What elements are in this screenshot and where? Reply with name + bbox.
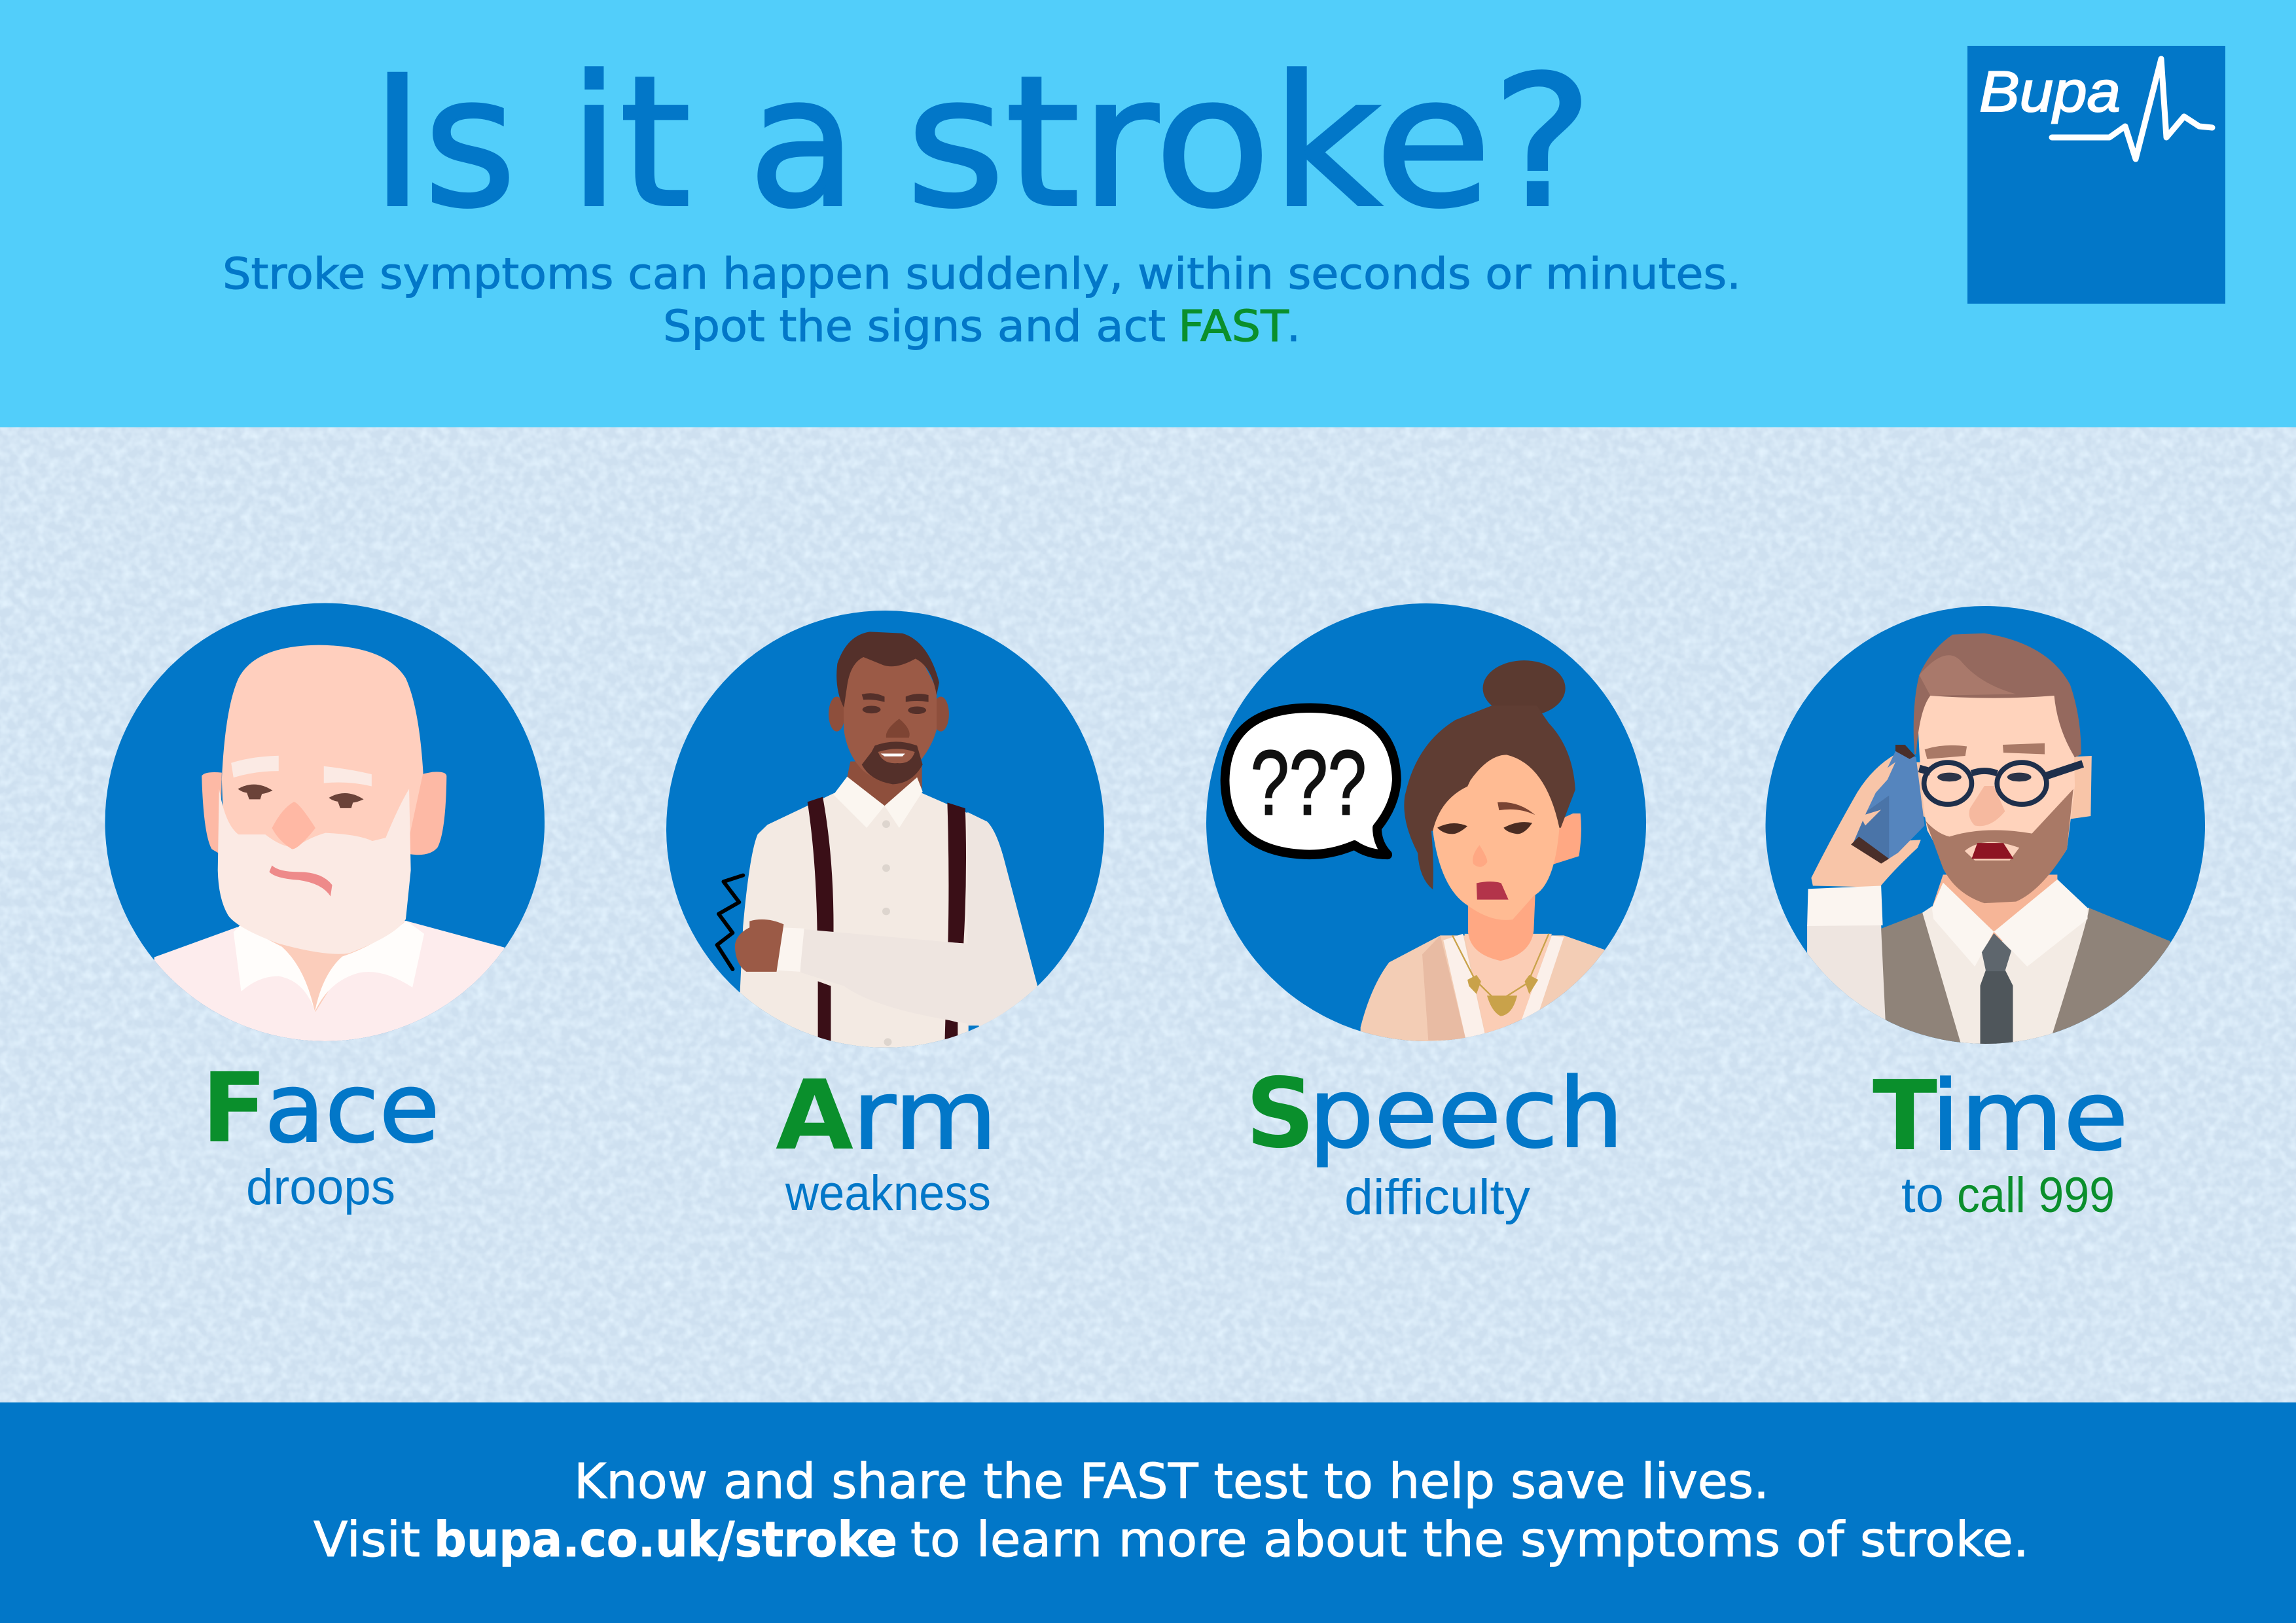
panel: textured light blue background bbox=[0, 427, 2296, 1402]
icon: man calling on phone bbox=[1766, 606, 2205, 1065]
text: difficulty: difficulty bbox=[1344, 1169, 1530, 1225]
heading: Time: ime bbox=[1931, 1060, 2128, 1172]
footer text: bupa.co.uk/stroke bbox=[434, 1512, 897, 1568]
title: a bbox=[748, 38, 857, 248]
panel: footer band bbox=[0, 1402, 2296, 1623]
footer text: to learn more about the symptoms of stroke. bbox=[910, 1512, 2029, 1568]
footer text bbox=[314, 1454, 2029, 1568]
heading: Speech: S bbox=[1246, 1058, 1315, 1169]
icon: man with drooping face bbox=[105, 603, 545, 1049]
text: weakness: weakness bbox=[785, 1166, 991, 1221]
heading: Arm bbox=[776, 1060, 997, 1171]
text: droops: droops bbox=[246, 1160, 395, 1215]
heading: Face: ace bbox=[264, 1052, 440, 1164]
logo: Bupa bbox=[1967, 46, 2225, 304]
text: to call 999 bbox=[1901, 1168, 2115, 1223]
logo: Bupa: Bupa bbox=[1979, 59, 2121, 124]
title: Is bbox=[371, 38, 516, 248]
panel: time bbox=[1766, 606, 2205, 1223]
panel: speech bbox=[1206, 603, 1646, 1225]
heading: Face: F bbox=[202, 1052, 267, 1164]
panel: face bbox=[105, 603, 545, 1215]
footer text: Visit bbox=[314, 1512, 420, 1568]
subtitle: FAST bbox=[1178, 301, 1289, 351]
panel: header band bbox=[0, 0, 2296, 427]
title: it bbox=[569, 38, 691, 248]
heading: Arm: A bbox=[776, 1060, 853, 1171]
subtitle: Spot the signs and act bbox=[663, 301, 1166, 351]
title: stroke? bbox=[906, 38, 1593, 248]
title bbox=[371, 38, 1593, 248]
subtitle: Stroke symptoms can happen suddenly, within seconds or minutes. bbox=[223, 249, 1741, 299]
icon: man with weak arm bbox=[666, 611, 1104, 1065]
heading: Arm: rm bbox=[852, 1060, 997, 1171]
heading: Speech: peech bbox=[1308, 1058, 1624, 1169]
footer text: Know and share the FAST test to help save lives. bbox=[574, 1454, 1769, 1510]
callout: speech bubble bbox=[1225, 708, 1397, 855]
panel: arm bbox=[666, 611, 1104, 1221]
heading: Time: T bbox=[1873, 1060, 1937, 1172]
callout: speech bubble: ??? bbox=[1251, 732, 1367, 834]
text: to call 999: to bbox=[1901, 1168, 1944, 1223]
text: to call 999: call 999 bbox=[1957, 1168, 2115, 1223]
subtitle: . bbox=[1287, 301, 1300, 351]
subtitle bbox=[223, 249, 1741, 351]
icon: woman with speech bubble bbox=[1206, 603, 1646, 1059]
